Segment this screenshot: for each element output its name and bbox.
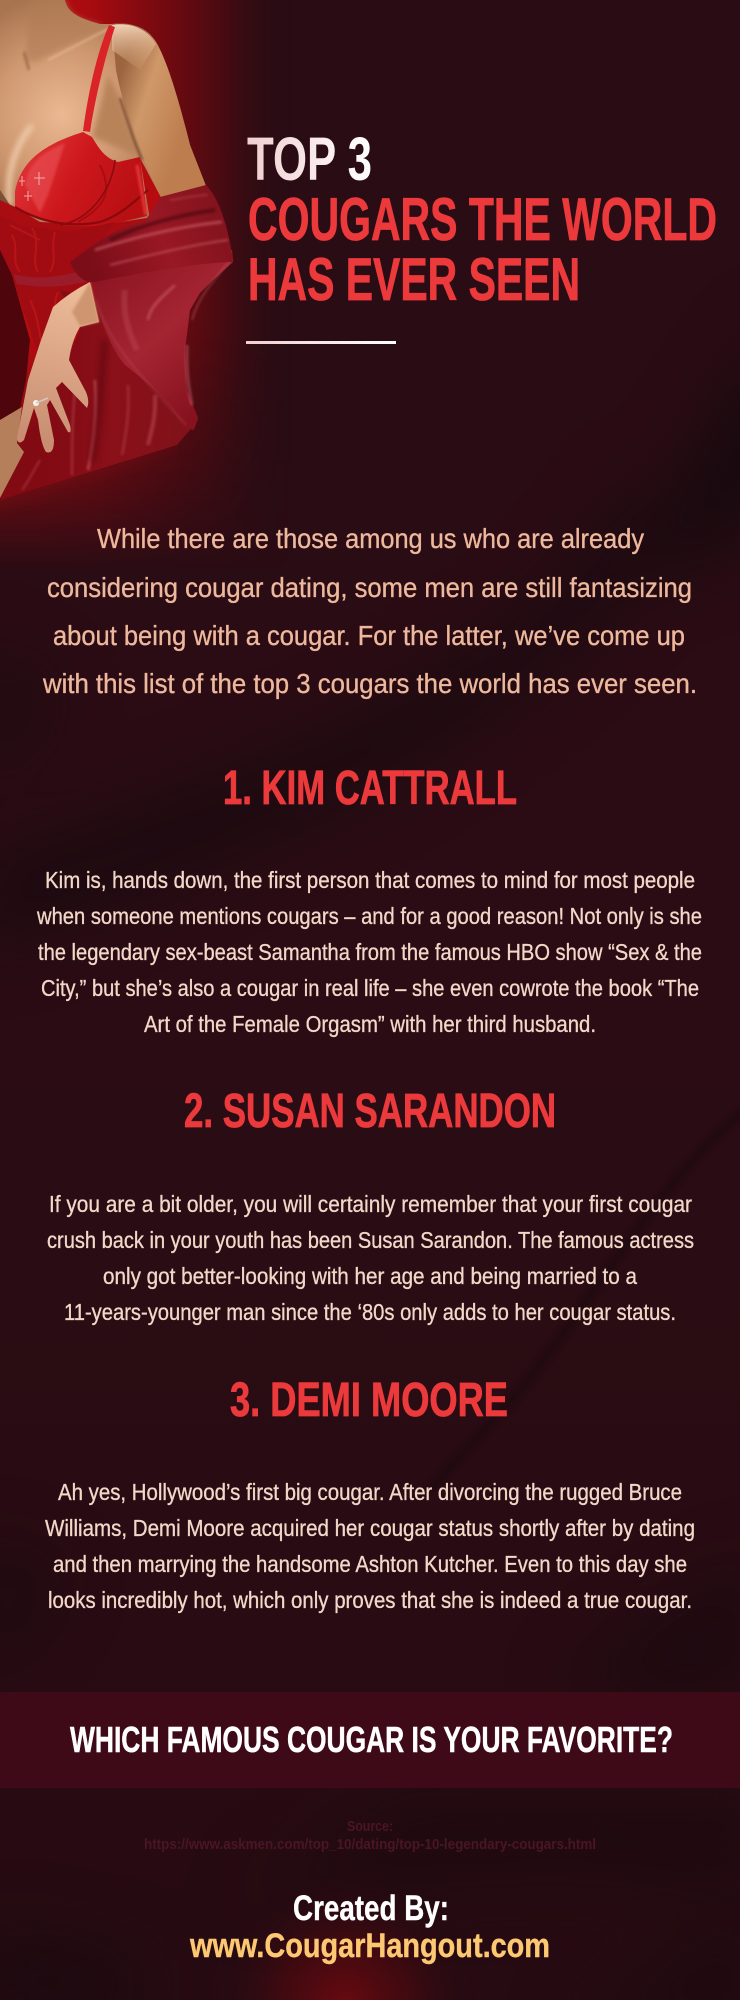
credit — [189, 1889, 550, 1965]
question banner — [0, 1692, 740, 1788]
hair — [0, 0, 24, 66]
hand and forearm — [17, 282, 99, 452]
title underline — [246, 341, 396, 344]
intro paragraph: While there are those among us who are already — [97, 523, 644, 554]
text: Kim Cattrall — [36, 867, 702, 1037]
ring — [33, 398, 48, 406]
corset and bra cup — [0, 132, 165, 320]
source — [144, 1818, 596, 1853]
heading: Kim Cattrall: 1. KIM CATTRALL — [223, 762, 517, 815]
intro paragraph: considering cougar dating, some men are still fantasizing — [47, 572, 692, 603]
text: Susan Sarandon — [47, 1191, 694, 1325]
dark robe at left — [0, 250, 30, 420]
text: Kim Cattrall: Art of the Female Orgasm” with her third husband. — [144, 1011, 596, 1037]
intro paragraph: about being with a cougar. For the latter, we’ve come up — [53, 620, 685, 651]
text: Susan Sarandon: only got better-looking with her age and being married to a — [103, 1263, 637, 1289]
heading: Susan Sarandon: 2. SUSAN SARANDON — [184, 1085, 556, 1138]
thigh — [0, 407, 24, 498]
title — [247, 125, 717, 313]
bra strap — [83, 25, 115, 132]
title: HAS EVER SEEN — [248, 246, 580, 313]
text: Demi Moore: Ah yes, Hollywood’s first big cougar. After divorcing the rugged Bruce — [58, 1479, 682, 1505]
intro paragraph — [42, 523, 697, 699]
lace corset body — [0, 215, 115, 360]
torso and arm skin — [0, 0, 206, 230]
robe belt — [13, 272, 87, 286]
lower satin skirt — [0, 290, 190, 500]
source: https://www.askmen.com/top_10/dating/top-10-legendary-cougars.html — [144, 1836, 596, 1853]
satin cape falling from sleeve — [90, 240, 233, 430]
illustration: woman in red lingerie and satin robe — [0, 0, 233, 500]
title: TOP 3 — [247, 125, 372, 193]
satin sleeve wrapped around arm — [70, 185, 233, 282]
fade below the illustration's diagonal cut — [0, 446, 181, 522]
credit: www.CougarHangout.com — [189, 1927, 550, 1965]
text: Susan Sarandon: If you are a bit older, you will certainly remember that your first cougar — [49, 1191, 692, 1217]
intro paragraph: with this list of the top 3 cougars the world has ever seen. — [42, 668, 697, 699]
credit: Created By: — [293, 1889, 449, 1928]
heading: Demi Moore: 3. DEMI MOORE — [230, 1374, 508, 1427]
text: Demi Moore — [45, 1479, 695, 1613]
source: Source: — [347, 1818, 393, 1835]
